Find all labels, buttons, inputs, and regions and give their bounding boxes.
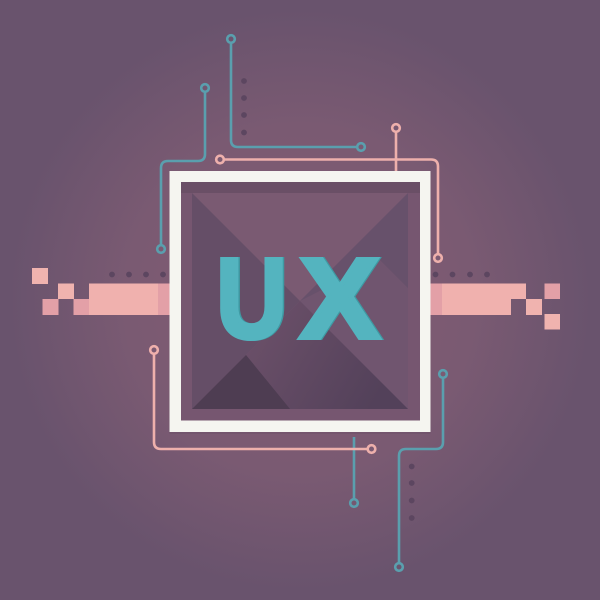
right pixel bar — [428, 284, 560, 330]
circuit line: teal top left — [157, 84, 209, 253]
white frame — [170, 171, 430, 434]
bottom dots — [409, 464, 415, 521]
left dots — [109, 272, 166, 277]
circuit line: teal top long — [227, 35, 365, 151]
circuit line: pink top — [216, 156, 442, 262]
UX title: U — [218, 236, 288, 362]
left pixel bar — [32, 268, 172, 315]
circuit line: teal bottom short — [350, 437, 358, 507]
pyramid facets — [192, 193, 408, 409]
right dots — [433, 272, 490, 277]
UX title — [216, 236, 380, 362]
circuit line: teal bottom right — [395, 370, 447, 571]
UX title: X — [300, 236, 379, 362]
circuit line: pink vertical — [392, 124, 400, 172]
UX title: U — [216, 236, 286, 362]
top dots — [241, 78, 247, 135]
circuit line: pink bottom — [150, 346, 375, 453]
UX title: X — [302, 236, 380, 362]
